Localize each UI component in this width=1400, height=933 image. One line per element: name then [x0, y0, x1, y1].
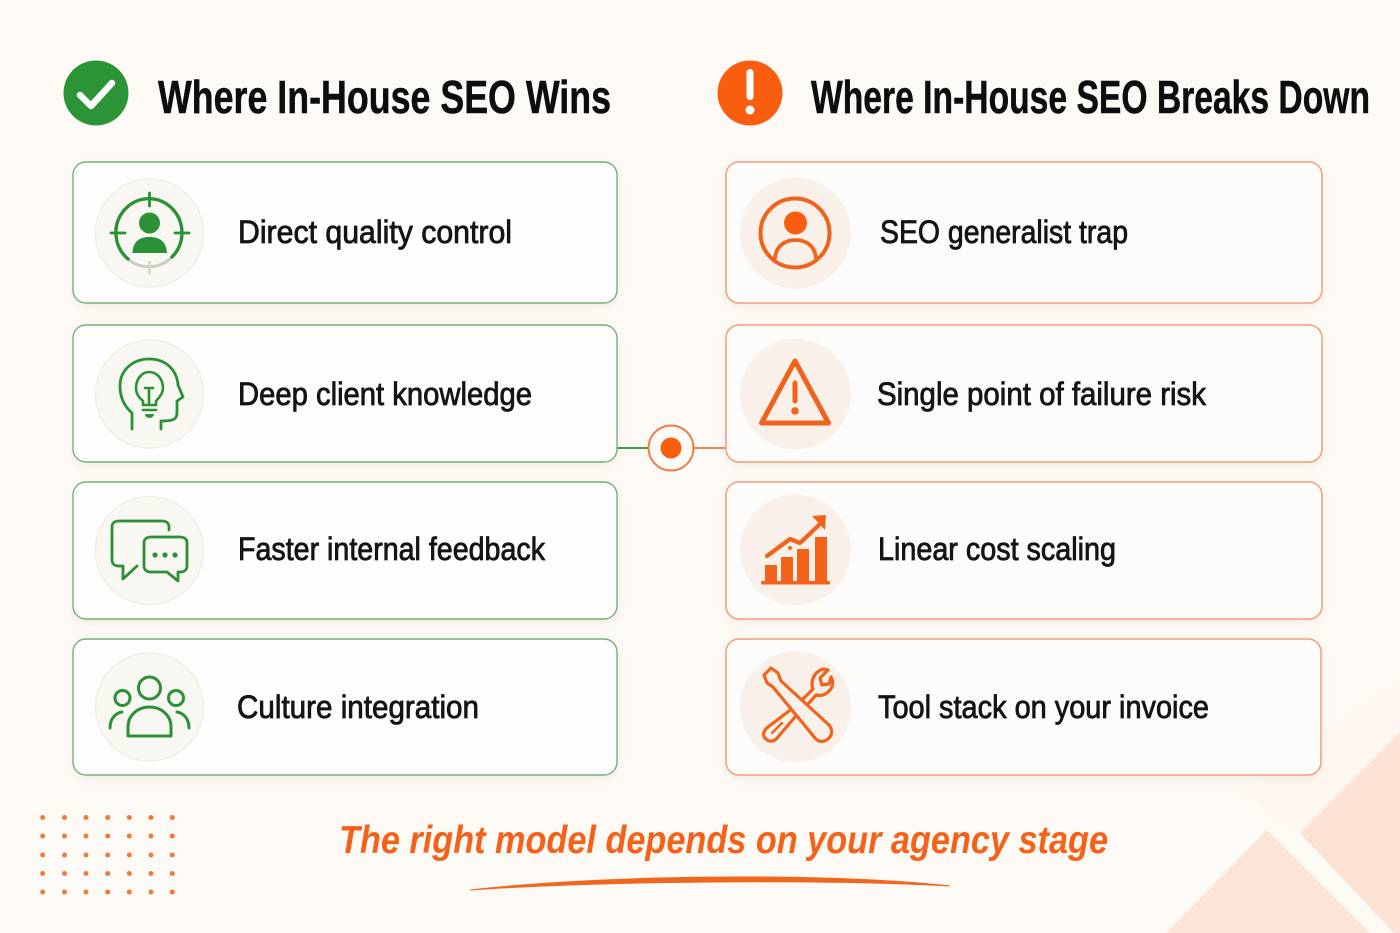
- icon: person in circle: [740, 178, 851, 288]
- panel: culture integration: [73, 639, 617, 775]
- label: Faster internal feedback: [238, 531, 546, 567]
- tagline: The right model depends on your agency stage: [339, 819, 1108, 862]
- label: Linear cost scaling: [878, 531, 1116, 567]
- label: Tool stack on your invoice: [878, 689, 1209, 725]
- label: Direct quality control: [238, 214, 512, 250]
- icon: target person: [96, 179, 204, 287]
- icon: warning triangle: [740, 338, 851, 450]
- heading: wins: [64, 60, 611, 126]
- decorative corner triangles: [1166, 680, 1400, 933]
- panel: deep client knowledge: [73, 325, 617, 462]
- panel: tool stack on your invoice: [726, 639, 1321, 775]
- underline swoosh: [470, 877, 950, 890]
- label: Deep client knowledge: [238, 376, 532, 412]
- label: Culture integration: [237, 689, 479, 725]
- panel: single point of failure risk: [726, 325, 1322, 462]
- label: SEO generalist trap: [880, 214, 1128, 250]
- icon: orange exclamation: [718, 60, 782, 126]
- icon: people group: [96, 653, 204, 761]
- icon: chat bubbles: [96, 496, 204, 604]
- heading: breaks down: [718, 60, 1370, 126]
- panel: direct quality control: [73, 162, 617, 303]
- panel: faster internal feedback: [73, 482, 617, 619]
- icon: crossed tools: [740, 652, 851, 762]
- dot grid: [40, 815, 175, 894]
- label: Single point of failure risk: [877, 376, 1207, 412]
- icon: head with lightbulb: [96, 340, 204, 448]
- connector: [617, 426, 726, 470]
- icon: green check: [64, 60, 128, 126]
- title: wins: Where In-House SEO Wins: [158, 71, 611, 123]
- panel: linear cost scaling: [726, 482, 1322, 619]
- panel: seo generalist trap: [726, 162, 1322, 303]
- icon: rising bar chart: [740, 494, 851, 606]
